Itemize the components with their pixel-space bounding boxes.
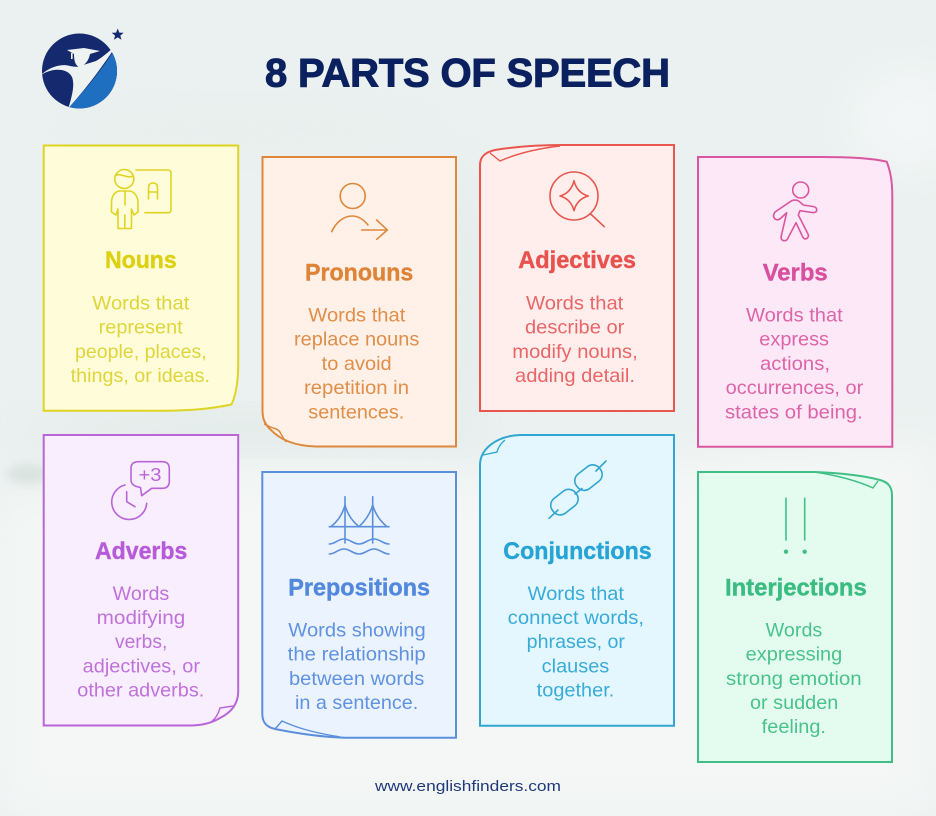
icon: exclamation marks <box>785 498 806 553</box>
heading: pronouns: Pronouns <box>305 260 413 287</box>
heading: prepositions: Prepositions <box>288 575 430 602</box>
description: interjections: Words <box>766 619 823 641</box>
description: conjunctions: phrases, or <box>527 631 625 653</box>
panel: adjectives <box>480 145 674 411</box>
description: interjections: or sudden <box>750 692 838 714</box>
description: adjectives: describe or <box>525 317 625 339</box>
description: verbs <box>725 304 864 423</box>
icon: magnifier with sparkle <box>550 172 604 227</box>
description: interjections <box>726 619 862 738</box>
icon: walking person <box>774 182 817 241</box>
description: nouns <box>71 292 210 387</box>
panel: conjunctions <box>480 435 674 726</box>
heading: adverbs: Adverbs <box>95 538 187 565</box>
heading: conjunctions: Conjunctions <box>503 538 652 565</box>
description: conjunctions: clauses <box>542 656 610 678</box>
description: pronouns: sentences. <box>308 401 404 423</box>
description: adverbs: Words <box>113 583 170 605</box>
heading: adjectives: Adjectives <box>518 247 636 274</box>
description: conjunctions: connect words, <box>508 607 644 629</box>
description: nouns: things, or ideas. <box>71 365 210 387</box>
icon: clock and plus three bubble <box>112 462 169 519</box>
description: prepositions: in a sentence. <box>295 692 418 714</box>
description: conjunctions <box>508 583 644 702</box>
description: pronouns <box>294 304 420 423</box>
icon: bridge over water <box>329 497 389 554</box>
panel: interjections <box>698 472 892 762</box>
description: verbs: states of being. <box>725 401 863 423</box>
description: prepositions: between words <box>289 668 425 690</box>
footer website: www.englishfinders.com <box>374 778 561 795</box>
panel: prepositions <box>262 472 456 738</box>
description: pronouns: to avoid <box>322 353 392 375</box>
heading: interjections: Interjections <box>725 575 867 602</box>
description: adjectives: adding detail. <box>515 365 635 387</box>
description: conjunctions: together. <box>537 680 614 702</box>
description: adverbs: verbs, <box>115 631 167 653</box>
title: 8 PARTS OF SPEECH <box>265 52 670 96</box>
description: pronouns: replace nouns <box>294 328 420 350</box>
panel: pronouns <box>262 157 456 446</box>
icon: chain links <box>547 461 606 518</box>
heading: nouns: Nouns <box>105 247 177 274</box>
description: adverbs: other adverbs. <box>77 680 204 702</box>
description: interjections: feeling. <box>762 716 826 738</box>
description: adverbs: modifying <box>97 607 185 629</box>
logo <box>39 28 125 112</box>
description: adjectives <box>512 292 638 387</box>
description: pronouns: Words that <box>308 304 406 326</box>
description: adverbs <box>77 583 204 702</box>
description: interjections: strong emotion <box>726 668 862 690</box>
panel: verbs <box>698 157 892 447</box>
panel: adverbs <box>44 435 238 726</box>
icon: person with arrow <box>332 184 387 239</box>
description: adverbs: adjectives, or <box>83 656 201 678</box>
description: nouns: represent <box>99 317 183 339</box>
description: nouns: people, places, <box>75 341 207 363</box>
description: verbs: actions, <box>760 353 830 375</box>
description: interjections: expressing <box>746 644 842 666</box>
heading: verbs: Verbs <box>763 260 828 287</box>
description: adjectives: modify nouns, <box>512 341 638 363</box>
description: adjectives: Words that <box>526 292 624 314</box>
description: conjunctions: Words that <box>528 583 625 605</box>
description: prepositions <box>288 619 426 714</box>
description: nouns: Words that <box>92 292 190 314</box>
description: pronouns: repetition in <box>304 377 409 399</box>
description: verbs: express <box>759 328 829 350</box>
description: prepositions: Words showing <box>288 619 426 641</box>
description: verbs: Words that <box>746 304 843 326</box>
icon: teacher at board <box>112 170 171 228</box>
icon: clock and plus three bubble: +3 <box>138 465 162 485</box>
description: prepositions: the relationship <box>288 644 426 666</box>
description: verbs: occurrences, or <box>726 377 864 399</box>
panel: nouns <box>44 146 238 411</box>
